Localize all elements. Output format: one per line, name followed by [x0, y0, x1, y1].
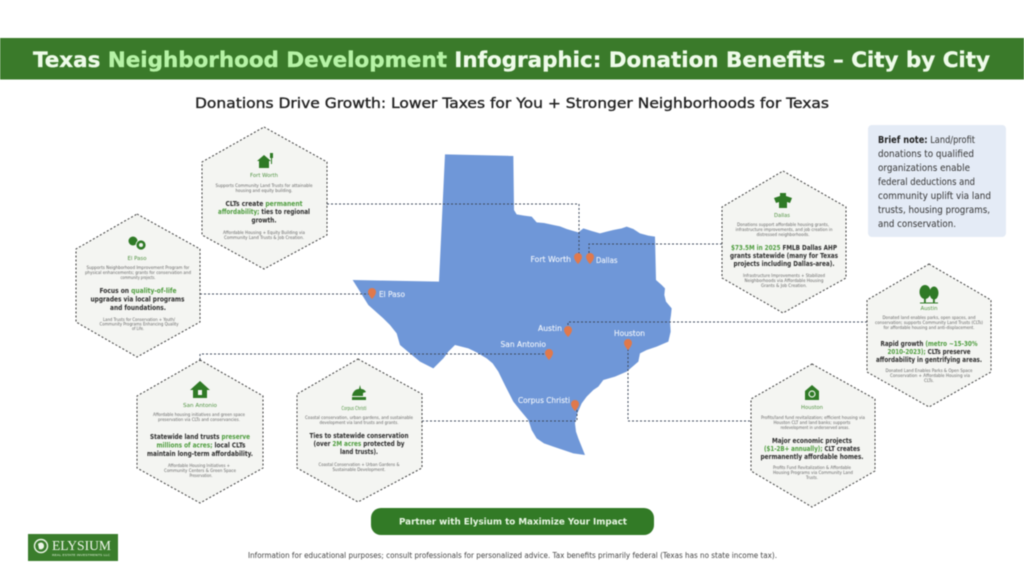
panel: Corpus Christi: Ties to statewide conservation: [310, 431, 408, 440]
panel: Dallas: distressed neighborhoods.: [756, 232, 810, 237]
subtitle: Donations Drive Growth: Lower Taxes for You + Stronger Neighborhoods for Texas: [195, 96, 829, 112]
panel: Corpus Christi: Coastal conservation, urban gardens, and sustainable: [305, 415, 414, 420]
icon: trees: [920, 285, 938, 304]
panel: San Antonio: preservation via CLTs and conservancies.: [158, 417, 240, 422]
brief note: Brief note: Land/profit: [878, 135, 975, 146]
panel: Fort Worth: Affordable Housing + Equity Building via: [223, 230, 306, 235]
brief note: and conservation.: [878, 219, 956, 230]
panel: San Antonio: Affordable housing initiatives and green space: [153, 412, 246, 417]
label: Dallas: Dallas: [596, 256, 618, 265]
label: Corpus Christi: Corpus Christi: [518, 396, 570, 405]
connector: Dallas: [589, 244, 846, 255]
title banner: [0, 38, 1024, 80]
panel: Fort Worth: CLTs create permanent: [226, 199, 303, 208]
panel: Dallas: infrastructure improvements, and job creation in: [736, 227, 833, 232]
call to action button: [371, 508, 654, 535]
panel: Houston: Housing Programs via Community Land: [773, 470, 853, 475]
panel: Houston: ($1-2B+ annually); CLT creates: [764, 444, 860, 453]
icon: shield and target: [128, 236, 146, 250]
panel: San Antonio: Statewide land trusts preserve: [150, 432, 250, 441]
Texas map: [200, 154, 867, 455]
panel: Houston: Profits Fund Revitalization & Affordable: [773, 465, 852, 470]
panel: El Paso: physical enhancements; grants for conservation and: [85, 270, 191, 275]
logo: Elysium: ELYSIUM: [52, 539, 112, 554]
panel: San Antonio: Affordable Housing Initiatives +: [168, 463, 230, 468]
connector: Fort Worth: [327, 204, 579, 255]
panel: Fort Worth: housing and equity building.: [236, 188, 292, 193]
pin: San Antonio: [545, 349, 553, 360]
panel: Dallas: $73.5M in 2025 FMLB Dallas AHP: [731, 243, 837, 252]
panel: Fort Worth: growth.: [252, 216, 276, 224]
panel: San Antonio: Community Centers & Green Space: [164, 468, 237, 473]
label: Fort Worth: Fort Worth: [530, 255, 571, 264]
icon: infrastructure tower: [774, 193, 792, 208]
pin: Dallas: [586, 253, 594, 264]
panel: San Antonio: [137, 360, 263, 503]
panel: El Paso: Focus on quality-of-life: [100, 286, 177, 295]
connector: Houston: [628, 345, 751, 421]
panel: El Paso: Land Trusts for Conservation + Youth/: [103, 317, 176, 322]
panel: San Antonio: Preservation.: [190, 473, 212, 478]
panel: Austin: Rapid growth (metro ~15-30%: [880, 339, 978, 348]
brief note: organizations enable: [878, 163, 970, 174]
footer disclaimer: Information for educational purposes; consult professionals for personalized advice. Tax benefits primarily federal (Texas has no state income tax).: [248, 551, 777, 560]
panel: El Paso: and foundations.: [110, 303, 166, 312]
panel: Dallas: Grants & Job Creation.: [761, 283, 807, 288]
panel: El Paso: of Life.: [132, 326, 144, 331]
panel: San Antonio: millions of acres; local CLTs: [156, 440, 246, 450]
panel: El Paso: community projects.: [120, 275, 156, 280]
panel: Houston: Houston CLT and land banks; supports: [774, 420, 850, 425]
panel: Austin: 2010-2023); CLTs preserve: [888, 347, 971, 356]
panel: Fort Worth: Supports Community Land Trusts for attainable: [216, 183, 313, 188]
call to action button: Partner with Elysium to Maximize Your Impact: [399, 518, 628, 528]
brief note: trusts, housing programs,: [878, 205, 990, 216]
panel: Corpus Christi: [297, 359, 422, 502]
panel: San Antonio: maintain long-term affordability.: [147, 449, 253, 458]
title banner: Texas Neighborhood Development Infographic: Donation Benefits – City by City: [33, 48, 990, 73]
panel: Austin: Austin: [920, 306, 938, 312]
brief note: federal deductions and: [878, 177, 975, 188]
label: El Paso: El Paso: [379, 290, 405, 299]
panel: Austin: Conservation + Affordable Housing via: [890, 373, 971, 378]
panel: Dallas: Donations support affordable housing grants,: [737, 222, 829, 227]
icon: house with gear: [805, 385, 819, 400]
label: Austin: Austin: [538, 324, 562, 333]
panel: Dallas: Neighborhoods via Affordable Housing: [744, 278, 824, 283]
pin: Corpus Christi: [571, 400, 579, 411]
panel: Austin: Donated Land Enables Parks & Open Space: [886, 368, 973, 373]
panel: Corpus Christi: Corpus Christi: [342, 406, 366, 412]
panel: Corpus Christi: Coastal Conservation + Urban Gardens &: [318, 462, 400, 467]
panel: Fort Worth: affordability; ties to regional: [218, 207, 310, 216]
connector: El Paso: [200, 293, 372, 295]
panel: El Paso: [76, 214, 200, 357]
panel: Houston: redevelopment in underserved areas.: [780, 425, 850, 430]
pin: Austin: [564, 326, 572, 337]
panel: Dallas: Dallas: [774, 213, 791, 219]
panel: San Antonio: San Antonio: [183, 403, 217, 409]
panel: Austin: CLTs.: [924, 378, 934, 383]
icon: coastal garden: [352, 385, 366, 400]
panel: El Paso: upgrades via local programs: [90, 294, 184, 304]
panel: El Paso: Supports Neighborhood Improvement Program for: [86, 265, 190, 270]
panel: Corpus Christi: land trusts).: [340, 447, 378, 456]
label: Houston: Houston: [614, 329, 645, 338]
logo: Elysium: [28, 534, 118, 561]
icon: house: [190, 381, 210, 398]
panel: Austin: affordability in gentrifying areas.: [876, 355, 982, 364]
panel: Austin: for affordable housing and anti-displacement.: [884, 325, 974, 330]
connector: Corpus Christi: [422, 406, 577, 421]
label: San Antonio: San Antonio: [500, 340, 546, 349]
brief note: [868, 125, 1006, 237]
panel: Houston: permanently affordable homes.: [760, 452, 864, 461]
panel: Dallas: projects including Dallas-area).: [734, 259, 834, 268]
panel: Corpus Christi: Sustainable Development.: [332, 467, 386, 472]
panel: Dallas: grants statewide (many for Texas: [730, 251, 838, 260]
panel: Austin: Donated land enables parks, open spaces, and: [882, 315, 976, 320]
pin: Fort Worth: [574, 253, 582, 264]
brief note: donations to qualified: [878, 149, 974, 160]
panel: Houston: Houston: [801, 405, 823, 411]
logo: Elysium: REAL ESTATE INVESTMENTS LLC: [52, 553, 110, 557]
connector: Austin: [568, 322, 867, 328]
panel: Austin: [867, 264, 991, 407]
panel: Fort Worth: [202, 127, 327, 269]
panel: Houston: [751, 364, 875, 507]
panel: Houston: Trusts.: [805, 475, 818, 480]
panel: El Paso: El Paso: [128, 256, 147, 262]
panel: Corpus Christi: (over 2M acres protected by: [314, 439, 405, 448]
panel: Corpus Christi: development via land trusts and grants.: [320, 420, 398, 425]
pin: Houston: [624, 339, 632, 350]
panel: El Paso: Community Programs Enhancing Quality: [100, 322, 179, 326]
panel: Fort Worth: Community Land Trusts & Job Creation.: [224, 235, 304, 240]
icon: house with key: [257, 153, 273, 168]
panel: Dallas: [722, 171, 846, 313]
panel: Dallas: Infrastructure Improvements + Stabilized: [743, 273, 825, 278]
panel: Houston: Profits/land fund revitalization; efficient housing via: [761, 415, 866, 420]
panel: Houston: Major economic projects: [772, 436, 852, 445]
brief note: community uplift via land: [878, 191, 991, 202]
connector: San Antonio: [200, 354, 548, 360]
panel: Fort Worth: Fort Worth: [250, 173, 278, 179]
panel: Austin: conservation; supports Community Land Trusts (CLTs): [875, 320, 983, 325]
state shape: [353, 154, 672, 455]
pin: El Paso: [368, 288, 376, 299]
